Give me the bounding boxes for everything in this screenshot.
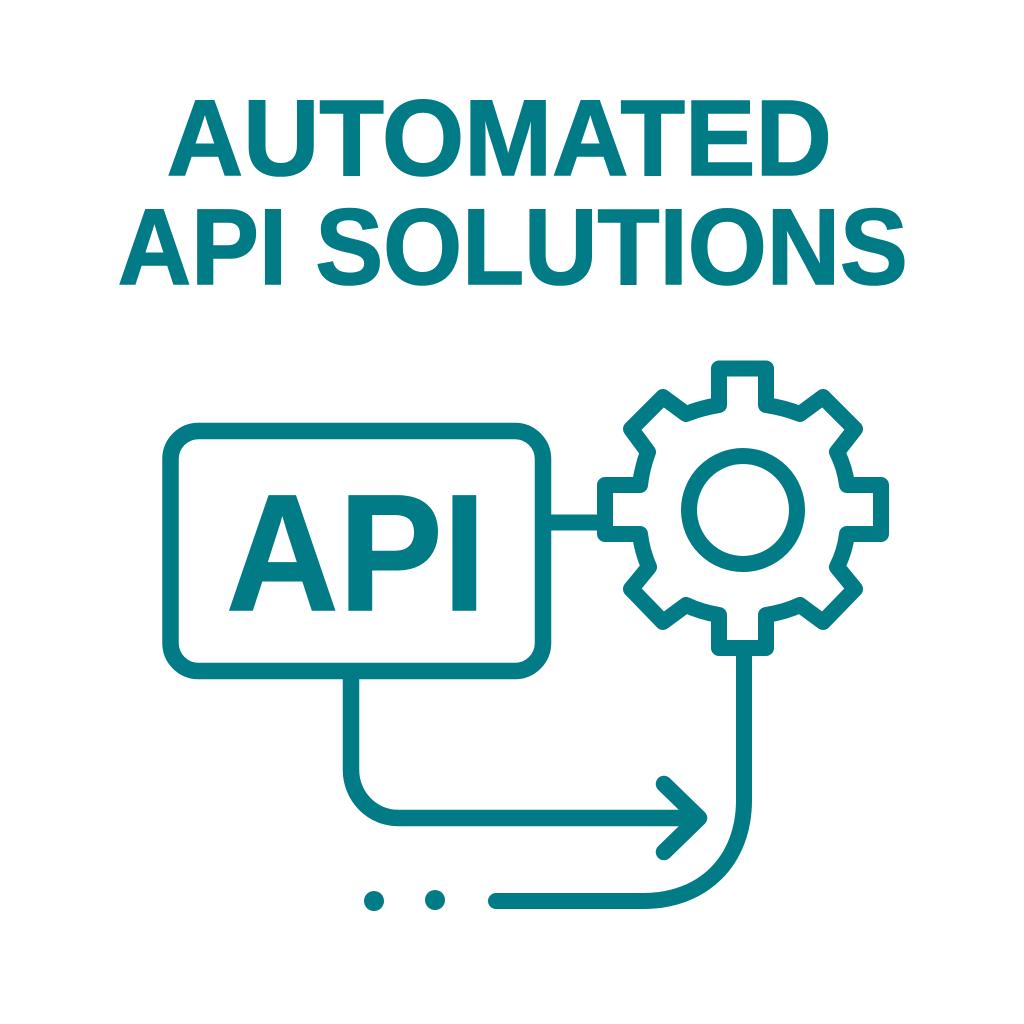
API box: API (226, 461, 486, 646)
title: AUTOMATED (167, 77, 832, 198)
title: API SOLUTIONS (118, 186, 908, 307)
return line: gear to dots (496, 656, 744, 901)
arrow: box to right (351, 680, 699, 852)
title (118, 77, 908, 307)
dots (364, 890, 445, 911)
API box (170, 431, 543, 671)
connector: box to gear (551, 514, 606, 530)
icon: gear (605, 368, 881, 648)
